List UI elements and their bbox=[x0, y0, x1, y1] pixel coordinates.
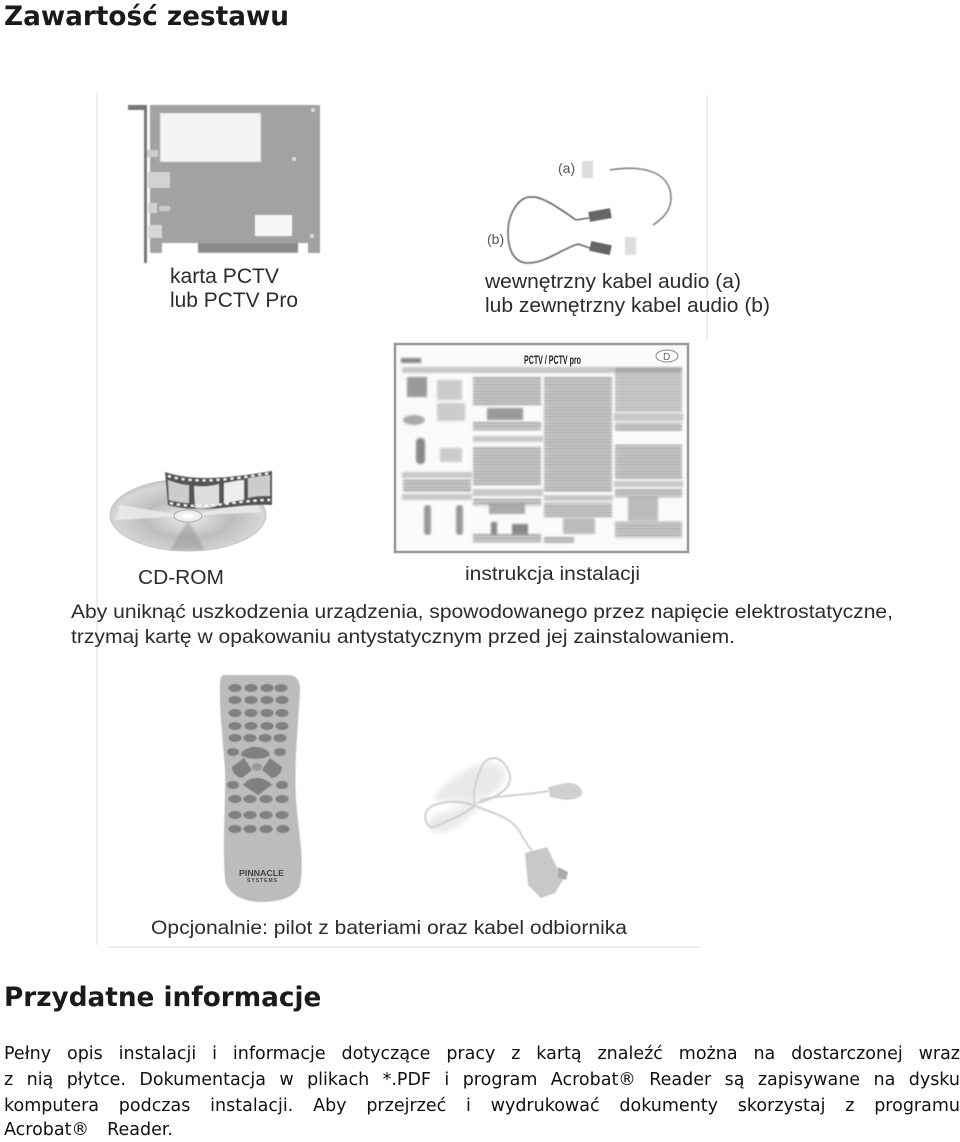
CD-ROM disc bbox=[110, 479, 266, 551]
static warning: Aby uniknąć uszkodzenia urządzenia, spowodowanego przez napięcie elektrostatyczne, bbox=[71, 601, 893, 623]
remote control: SYSTEMS bbox=[247, 878, 278, 884]
body text: komputera podczas instalacji. Aby przejrzeć i wydrukować dokumenty skorzystaj z programu bbox=[4, 1096, 960, 1116]
cable labels: lub zewnętrzny kabel audio (b) bbox=[485, 295, 770, 317]
receiver cable bbox=[425, 758, 582, 898]
static warning bbox=[71, 601, 893, 648]
cable labels: (b) bbox=[487, 231, 504, 247]
title: Zawartość zestawu bbox=[4, 2, 289, 32]
static warning: trzymaj kartę w opakowaniu antystatycznym przed jej zainstalowaniem. bbox=[71, 626, 735, 648]
body text bbox=[4, 1044, 960, 1140]
body text: Acrobat® Reader. bbox=[4, 1120, 173, 1140]
CD-ROM label: CD-ROM bbox=[138, 567, 224, 589]
card label bbox=[170, 265, 298, 312]
card label: karta PCTV bbox=[170, 265, 279, 288]
body text: Pełny opis instalacji i informacje dotyczące pracy z kartą znaleźć można na dostarczonej wraz bbox=[4, 1044, 960, 1064]
card label: lub PCTV Pro bbox=[170, 289, 298, 312]
installation sheet bbox=[395, 344, 688, 552]
cable labels: (a) bbox=[558, 160, 575, 176]
cable labels bbox=[484, 160, 770, 317]
sheet label: instrukcja instalacji bbox=[465, 564, 640, 585]
optional accessories label: Opcjonalnie: pilot z bateriami oraz kabel odbiornika bbox=[151, 918, 627, 939]
remote control bbox=[220, 675, 302, 902]
installation sheet: D bbox=[663, 352, 670, 363]
remote control: PINNACLE bbox=[239, 869, 285, 878]
audio cables bbox=[508, 161, 671, 263]
cable labels: wewnętrzny kabel audio (a) bbox=[484, 271, 741, 293]
film strip bbox=[165, 471, 272, 509]
installation sheet: PCTV / PCTV pro bbox=[524, 353, 581, 367]
body text: z nią płytce. Dokumentacja w plikach *.PDF i program Acrobat® Reader są zapisywane na dysku bbox=[4, 1070, 960, 1090]
PCTV card bbox=[128, 105, 320, 263]
heading: useful information: Przydatne informacje bbox=[4, 983, 321, 1013]
